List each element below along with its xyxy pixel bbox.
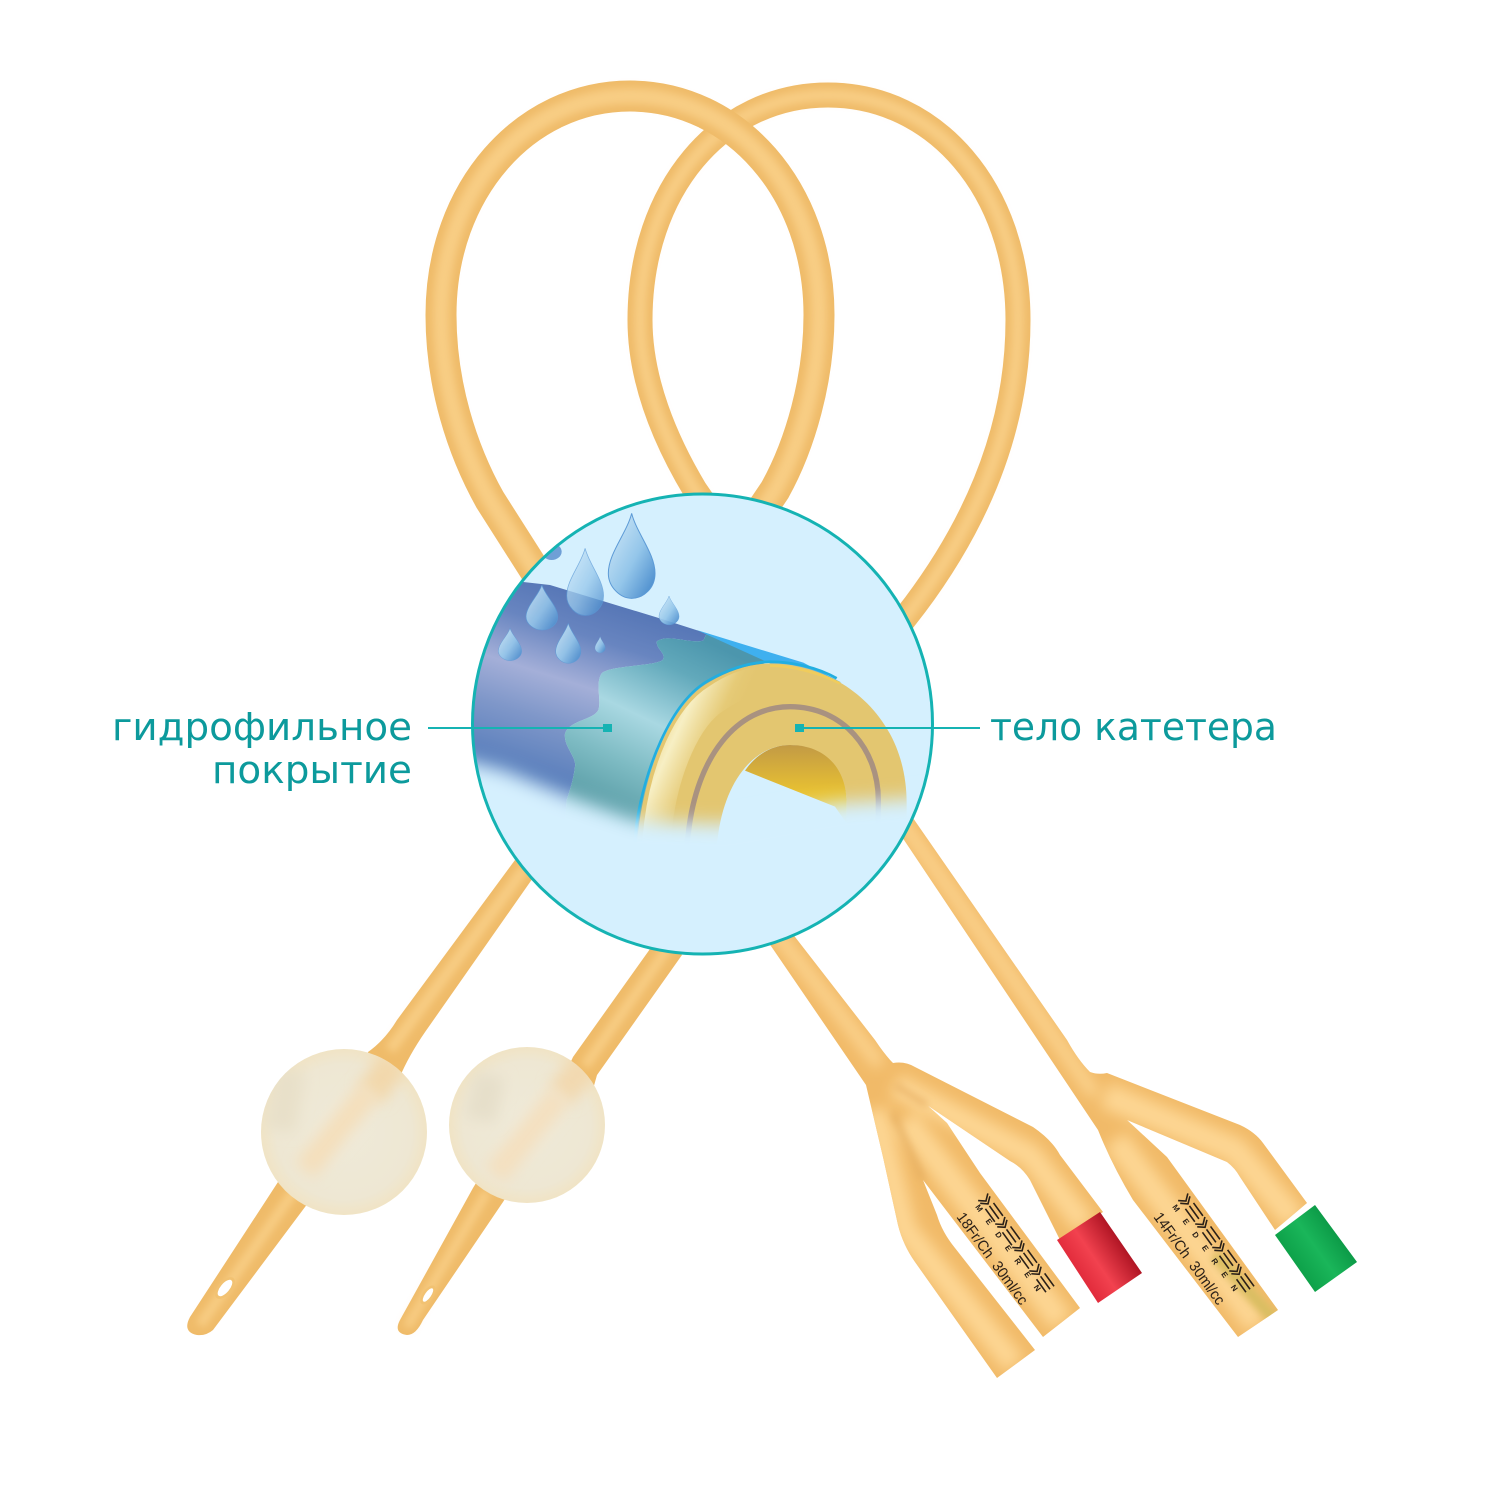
water droplets	[498, 513, 679, 663]
catheter 1: tip with drainage eye	[187, 1155, 325, 1335]
red port cap	[1057, 1212, 1142, 1303]
droplet cut by lens edge	[546, 546, 562, 560]
balloon: left catheter	[261, 1049, 427, 1215]
top wall edge	[770, 666, 840, 683]
bright coating rim	[635, 660, 838, 830]
imprint: 18Fr catheter: MEDEREN	[973, 1203, 1043, 1293]
label: hydrophilic coating: гидрофильное	[112, 705, 412, 749]
hydrophilic coating: teal zone	[565, 634, 765, 833]
catheter wall	[638, 663, 907, 838]
label: catheter body: тело катетера	[990, 705, 1277, 749]
hydrophilic coating: blue zone	[474, 582, 706, 810]
catheter 2: tip with drainage eye	[398, 1160, 520, 1335]
leader: catheter body	[795, 724, 980, 732]
catheter 1: three-way hub	[770, 936, 1103, 1378]
label: hydrophilic coating	[112, 705, 412, 792]
label: hydrophilic coating: покрытие	[212, 748, 412, 792]
lumen opening	[745, 745, 847, 823]
catheter 2: rear loop	[640, 95, 1018, 650]
leader: hydrophilic coating	[428, 724, 612, 732]
cross-section illustration	[471, 492, 934, 956]
magnified cross-section lens	[471, 492, 934, 956]
catheter 1: lower stem to balloon	[360, 860, 535, 1100]
imprint: 14Fr catheter	[1150, 1193, 1255, 1309]
imprint: 14Fr catheter: MEDEREN	[1170, 1203, 1240, 1293]
wall highlight	[644, 672, 739, 830]
imprint: 18Fr catheter	[953, 1193, 1055, 1309]
balloon: right catheter	[449, 1047, 605, 1203]
catheter 1: front loop	[441, 96, 819, 720]
fade-out mask	[476, 750, 907, 858]
catheter 2: lower stem to balloon	[560, 935, 682, 1100]
lens outline	[472, 494, 932, 954]
catheter 2: two-way hub	[904, 819, 1307, 1337]
green port cap	[1275, 1205, 1357, 1292]
outer blue edge sliver	[697, 630, 842, 683]
inner lumen ring	[686, 704, 881, 832]
infographic: coated Foley catheters	[116, 80, 1357, 1378]
imprint: 14Fr catheter: 14Fr/Ch 30ml/cc	[1150, 1209, 1228, 1309]
imprint: 18Fr catheter: 18Fr/Ch 30ml/cc	[953, 1209, 1031, 1309]
